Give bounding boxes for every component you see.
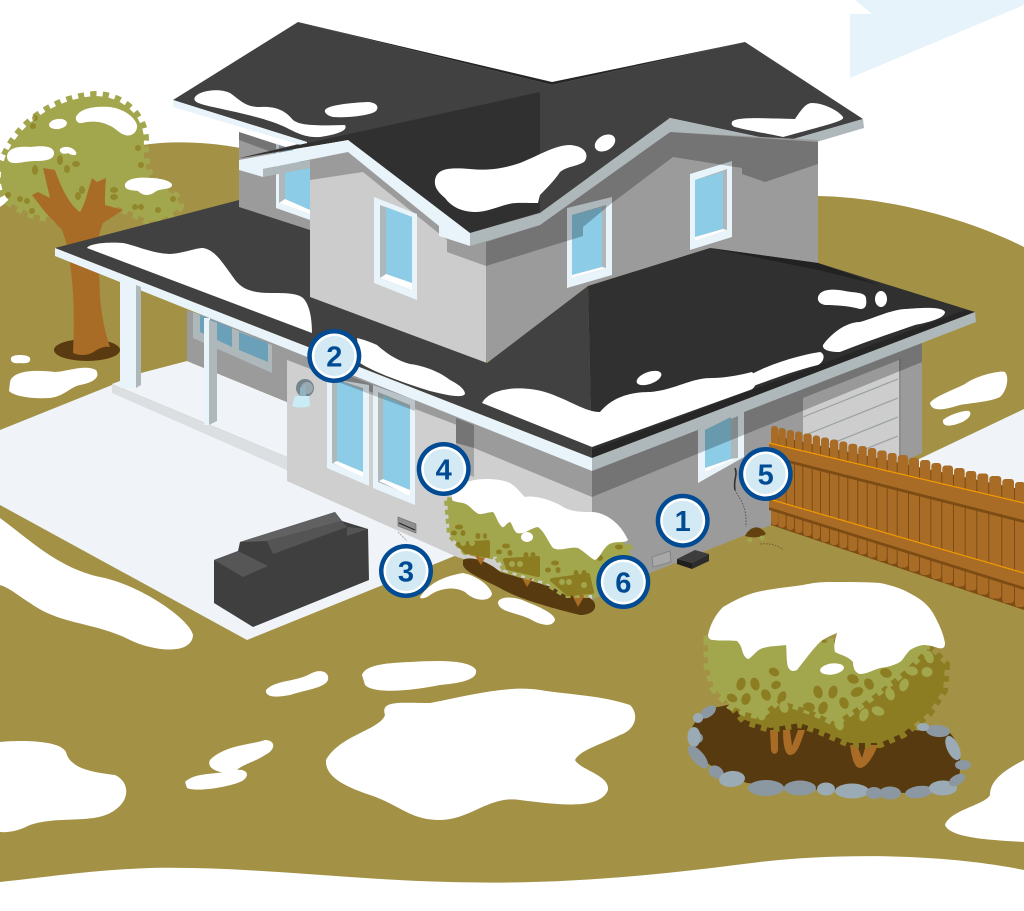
main lower roof [55, 200, 976, 471]
lower right garage wall [592, 340, 922, 600]
double patio windows [327, 368, 415, 505]
badge 6 [596, 555, 650, 609]
wooden fence [769, 426, 1024, 610]
wall vent [398, 517, 416, 541]
hedge [447, 479, 630, 615]
tree [1, 96, 179, 361]
foundation vent [652, 551, 671, 567]
badge 1: 1 [675, 506, 691, 538]
badge 3 [379, 544, 433, 598]
eave shadow on middle section [486, 132, 818, 266]
porch floor [112, 361, 287, 457]
outdoor AC unit / covered furniture [214, 512, 369, 627]
porch pillars [120, 281, 217, 425]
badge 1 [656, 494, 710, 548]
badge 2: 2 [326, 342, 342, 374]
rodent bait box [677, 550, 709, 569]
badge 4 [417, 442, 471, 496]
porch curb [112, 384, 287, 470]
patio behind fence [917, 409, 1024, 520]
upper back roof [173, 22, 864, 158]
pale blue sky shape [850, 0, 1024, 78]
badge 5 [739, 447, 793, 501]
badge 6: 6 [615, 568, 631, 600]
center upper window [567, 197, 612, 288]
ground snow patches [0, 355, 1024, 842]
right upper window [690, 161, 732, 250]
upper back wall with window [239, 132, 310, 230]
middle section left wall [310, 145, 486, 363]
large foreground bush [684, 582, 971, 800]
badge 5: 5 [758, 460, 774, 492]
porch back wall with windows [187, 310, 290, 402]
wall crack and rodent burrow [735, 468, 783, 550]
shadow under right eave [592, 342, 922, 497]
badge 4: 4 [436, 454, 452, 486]
badge 2 [307, 329, 361, 383]
middle section right wall [470, 132, 818, 363]
front gable roof [239, 85, 670, 246]
wall lamp [292, 379, 314, 408]
front entry wall [287, 345, 592, 600]
patio slab [0, 385, 457, 640]
small garage wall window [698, 410, 744, 483]
badge 3: 3 [398, 556, 414, 588]
garage door [803, 358, 900, 510]
left middle window [374, 197, 417, 300]
